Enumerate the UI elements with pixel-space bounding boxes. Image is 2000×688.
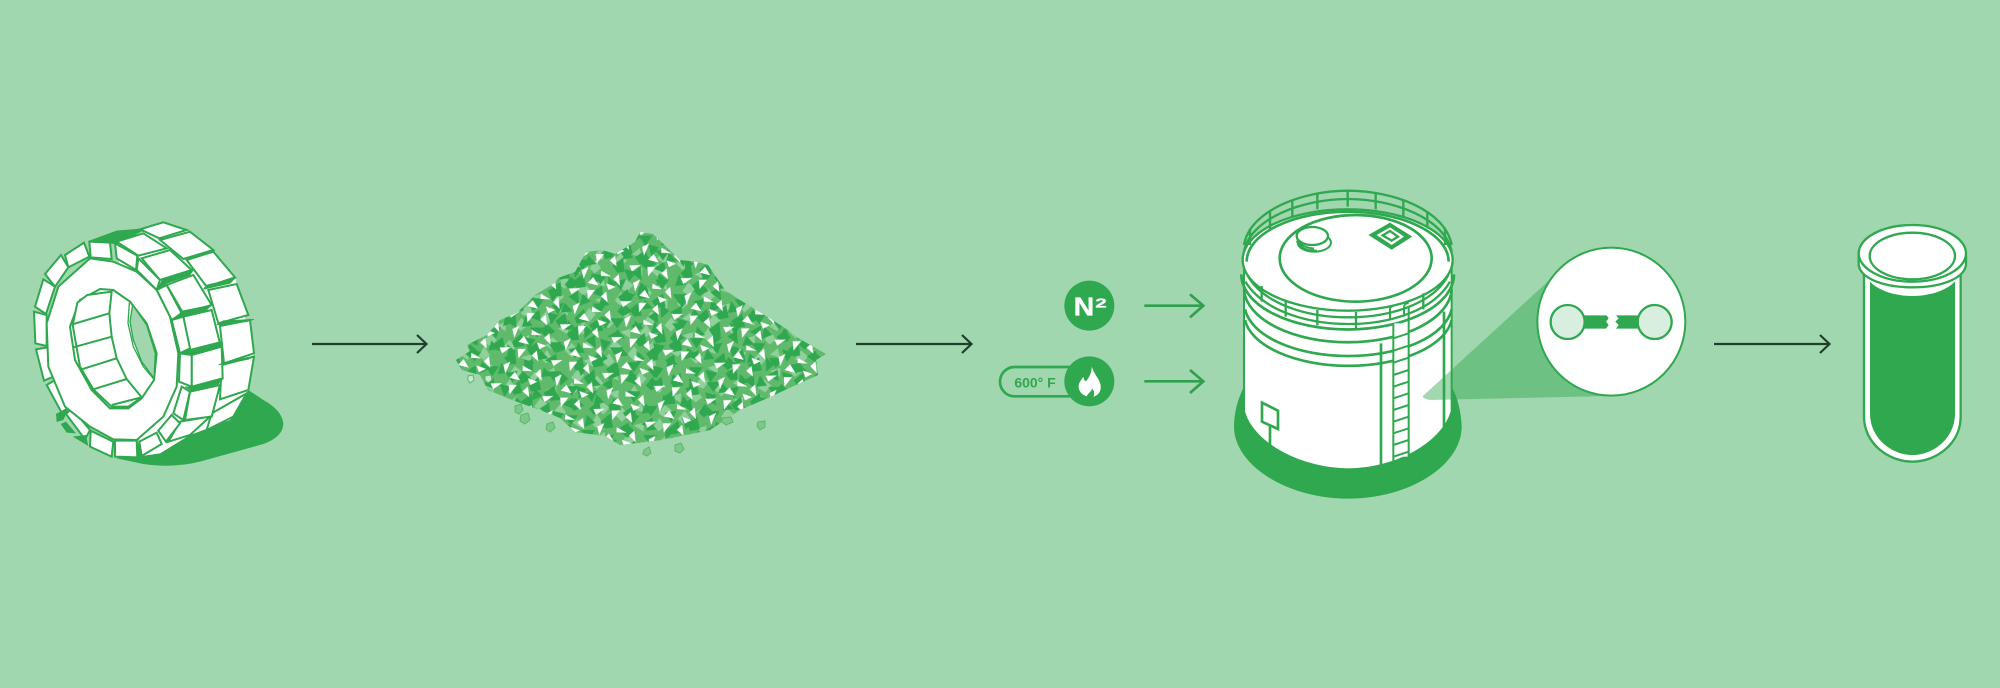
temperature pill label: 600° F [1014,375,1056,391]
crumb pile [456,232,826,445]
inputs: nitrogen and heat [1000,281,1203,406]
tread shadow slivers [157,270,254,391]
tank roof deck [1241,209,1454,329]
icon: pile of shredded rubber crumbs [456,232,826,456]
left atom [1551,305,1585,339]
tire tread backing [117,223,254,456]
tank body [1244,260,1452,469]
vial liquid [1870,282,1955,455]
temperature pill label [1000,367,1083,396]
icon: vial of oil [1859,225,1966,462]
tire inner hole [70,289,157,408]
vial lower lip [1859,257,1966,287]
arrow: heat into tank [1144,370,1203,393]
broken bond left [1583,315,1609,329]
icon: tire [34,222,283,466]
tank body bands [1244,291,1452,466]
icon: nitrogen badge [1064,281,1114,331]
arrow: tank to oil [1714,335,1830,353]
roof hatch [1297,227,1331,252]
loose crumbs [468,375,765,456]
ladder [1390,303,1409,471]
vial opening [1870,233,1955,279]
tire lower-left dark slivers [56,407,88,446]
arrow: crumbs to tank [856,335,972,353]
rear railing [1244,191,1452,252]
vial rim [1859,225,1966,282]
icon: nitrogen badge: N [1074,291,1094,321]
icon: pyrolysis tank [1234,191,1462,499]
vial lip underside [1864,241,1961,296]
arrow: nitrogen into tank [1144,294,1203,317]
tire sidewall tread blocks [34,242,180,457]
front railing [1245,275,1450,328]
broken bond right [1615,315,1640,329]
magnified molecular bond [1537,248,1685,396]
vial body [1864,273,1961,462]
icon: flame badge [1064,356,1114,406]
magnifier cone [1423,275,1611,400]
icon: nitrogen badge: 2 [1095,295,1107,310]
tire rear tread row [140,222,254,430]
tire front tread row [89,229,223,442]
tank sign [1262,403,1278,450]
infographic: tire recycling process [32,190,1968,499]
tank base [1234,387,1462,499]
tire ground shadow [117,390,283,466]
right atom [1638,305,1672,339]
roof vent [1371,224,1410,248]
tire sidewall face [47,258,178,440]
arrow: tire to crumbs [312,335,426,353]
magnifier circle [1537,248,1685,396]
